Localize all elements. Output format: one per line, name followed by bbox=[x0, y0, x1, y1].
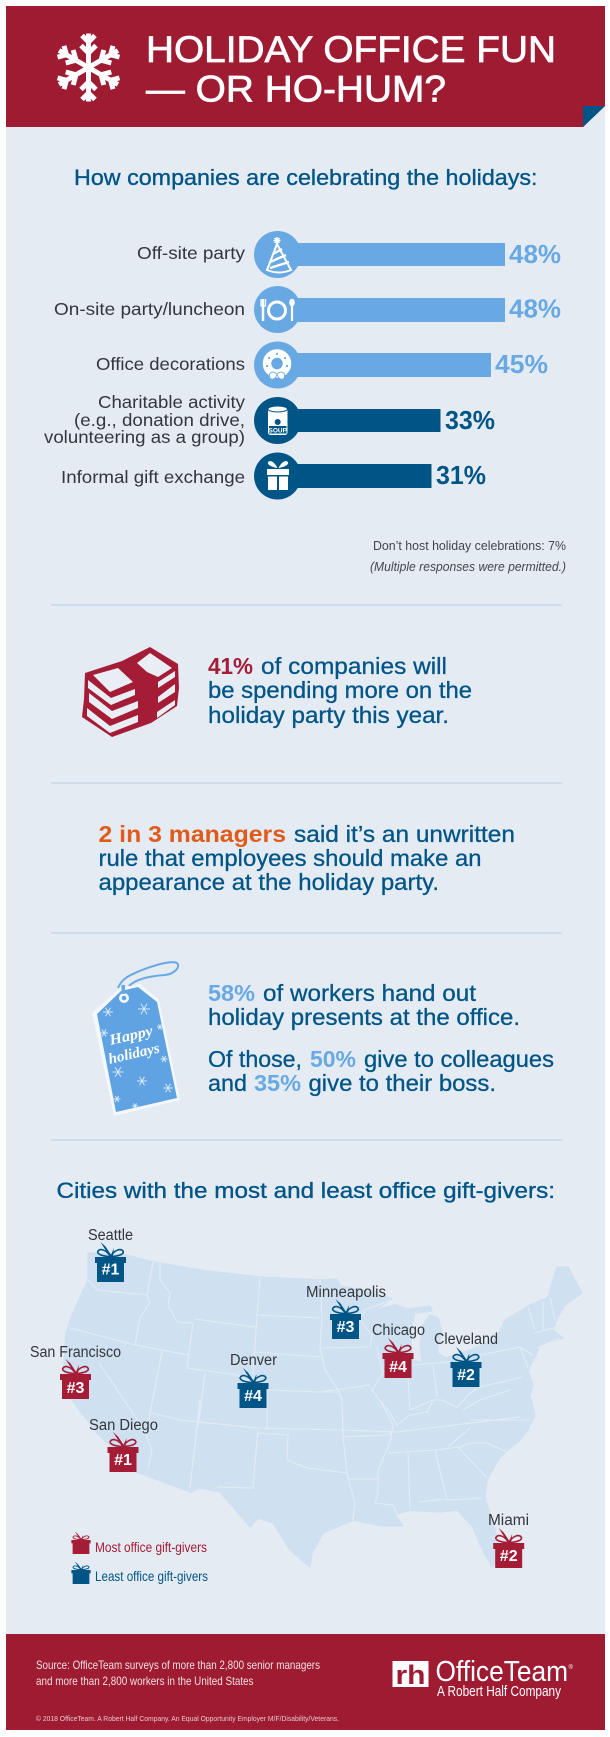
marker: San Francisco: #3 bbox=[67, 1380, 84, 1397]
marker: Cleveland: Cleveland bbox=[434, 1331, 498, 1348]
header banner bbox=[6, 6, 605, 127]
text: 41 percent: holiday party this year. bbox=[208, 702, 449, 728]
logo: A Robert Half Company bbox=[437, 1683, 561, 1700]
text: 58 percent of workers: give to colleagues bbox=[364, 1046, 554, 1072]
stat: managers: 2 in 3 managers bbox=[98, 821, 286, 847]
text: 41 percent: of companies will bbox=[261, 653, 447, 679]
legend bbox=[71, 1532, 208, 1584]
icon: gift box bbox=[267, 461, 289, 490]
marker: Seattle bbox=[88, 1227, 133, 1282]
marker: Cleveland bbox=[434, 1331, 498, 1387]
icon: gift tag bbox=[92, 962, 180, 1116]
row: on-site party: On-site party/luncheon bbox=[54, 299, 245, 319]
marker: San Diego: San Diego bbox=[89, 1417, 158, 1434]
icon: soup can: SOUP bbox=[268, 427, 288, 434]
text: 58 percent of workers: of workers hand out bbox=[263, 980, 477, 1006]
row: off-site party bbox=[137, 231, 561, 278]
row: charitable activity: Charitable activity bbox=[98, 392, 245, 412]
map: United States bbox=[64, 1253, 582, 1567]
row: office decorations: Office decorations bbox=[96, 354, 245, 374]
copyright: © 2018 OfficeTeam. A Robert Half Company. An Equal Opportunity Employer M/F/Disability/Veterans. bbox=[36, 1714, 339, 1723]
stat: managers bbox=[98, 821, 515, 895]
note: no celebrations: Don’t host holiday celebrations: 7% bbox=[373, 538, 566, 553]
row: office decorations: 45% bbox=[495, 349, 548, 379]
legend: Most office gift-givers bbox=[95, 1539, 207, 1555]
stat: spending more bbox=[82, 647, 472, 737]
text: 58 percent of workers: 58% bbox=[208, 980, 255, 1006]
stat: presents bbox=[92, 962, 554, 1116]
logo: rh bbox=[396, 1660, 426, 1690]
marker: Denver: #4 bbox=[244, 1388, 262, 1405]
logo: ® bbox=[568, 1664, 574, 1671]
text: 58 percent of workers: give to their boss. bbox=[308, 1070, 496, 1096]
marker: Denver bbox=[230, 1352, 277, 1408]
row: on-site party bbox=[54, 286, 561, 333]
title bbox=[146, 29, 556, 110]
text: 41 percent: 41% bbox=[208, 653, 253, 679]
icon: gift tag: Happy bbox=[107, 1023, 155, 1049]
row: charitable activity bbox=[44, 392, 495, 447]
icon: snowflake bbox=[55, 34, 122, 102]
marker: Denver: Denver bbox=[230, 1352, 277, 1369]
row: charitable activity: 33% bbox=[445, 405, 495, 435]
heading: cities: Cities with the most and least office gift-givers: bbox=[56, 1178, 555, 1203]
marker: Cleveland: #2 bbox=[457, 1367, 475, 1384]
icon: party hat bbox=[267, 237, 291, 272]
footer bbox=[6, 1634, 605, 1730]
text: 58 percent of workers: holiday presents at the office. bbox=[208, 1004, 520, 1030]
text: 58 percent of workers: 35% bbox=[254, 1070, 301, 1096]
source text: and more than 2,800 workers in the United States bbox=[36, 1674, 254, 1688]
note: multiple responses: (Multiple responses were permitted.) bbox=[370, 559, 566, 574]
marker: Minneapolis bbox=[306, 1284, 386, 1339]
legend: Least office gift-givers bbox=[95, 1568, 208, 1584]
icon: folded corner bbox=[583, 106, 605, 127]
text: 58 percent of workers: 50% bbox=[310, 1046, 356, 1072]
source text: Source: OfficeTeam surveys of more than 2,800 senior managers bbox=[36, 1658, 320, 1672]
heading: how companies celebrate: How companies are celebrating the holidays: bbox=[74, 165, 538, 190]
logo: OfficeTeam bbox=[436, 1656, 568, 1688]
stat: managers: appearance at the holiday party. bbox=[98, 869, 439, 895]
marker: Seattle: Seattle bbox=[88, 1227, 133, 1244]
marker: Miami: Miami bbox=[488, 1512, 529, 1529]
icon: gift tag: holidays bbox=[107, 1040, 161, 1068]
marker: Chicago: #4 bbox=[389, 1359, 407, 1376]
icon: soup can bbox=[268, 406, 288, 435]
marker: San Diego bbox=[89, 1417, 158, 1472]
stat: managers: rule that employees should make an bbox=[98, 845, 482, 871]
title: HOLIDAY OFFICE FUN bbox=[146, 29, 556, 70]
marker: Miami: #2 bbox=[500, 1548, 518, 1565]
row: off-site party: 48% bbox=[509, 239, 561, 269]
text: 58 percent of workers bbox=[208, 980, 554, 1096]
text: 41 percent: be spending more on the bbox=[208, 677, 472, 703]
row: informal gift exchange: Informal gift exchange bbox=[61, 467, 245, 487]
marker: Minneapolis: #3 bbox=[337, 1319, 354, 1336]
marker: Miami bbox=[488, 1512, 529, 1568]
row: charitable activity: volunteering as a group) bbox=[44, 427, 245, 447]
marker: Chicago bbox=[372, 1322, 425, 1378]
row: off-site party: Off-site party bbox=[137, 243, 245, 263]
source text bbox=[36, 1658, 320, 1688]
row: office decorations bbox=[96, 342, 548, 388]
row: on-site party: 48% bbox=[509, 294, 561, 324]
text: 58 percent of workers: Of those, bbox=[208, 1046, 302, 1072]
row: charitable activity: (e.g., donation drive, bbox=[74, 410, 245, 430]
marker: San Diego: #1 bbox=[114, 1452, 132, 1469]
text: 41 percent bbox=[208, 653, 472, 728]
marker: Minneapolis: Minneapolis bbox=[306, 1284, 386, 1301]
title: — OR HO-HUM? bbox=[146, 68, 446, 110]
logo bbox=[392, 1656, 574, 1700]
stat: managers: said it’s an unwritten bbox=[294, 821, 515, 847]
row: informal gift exchange: 31% bbox=[436, 460, 486, 490]
icon: stack of money bbox=[82, 647, 179, 737]
text: 58 percent of workers: and bbox=[208, 1070, 247, 1096]
marker: Seattle: #1 bbox=[102, 1262, 120, 1278]
bar chart: celebrations bbox=[44, 231, 561, 500]
marker: San Francisco bbox=[30, 1344, 121, 1399]
marker: San Francisco: San Francisco bbox=[30, 1344, 121, 1361]
row: informal gift exchange bbox=[61, 452, 486, 500]
icon: plate and cutlery bbox=[261, 299, 295, 321]
marker: Chicago: Chicago bbox=[372, 1322, 425, 1339]
icon: wreath bbox=[266, 353, 288, 379]
